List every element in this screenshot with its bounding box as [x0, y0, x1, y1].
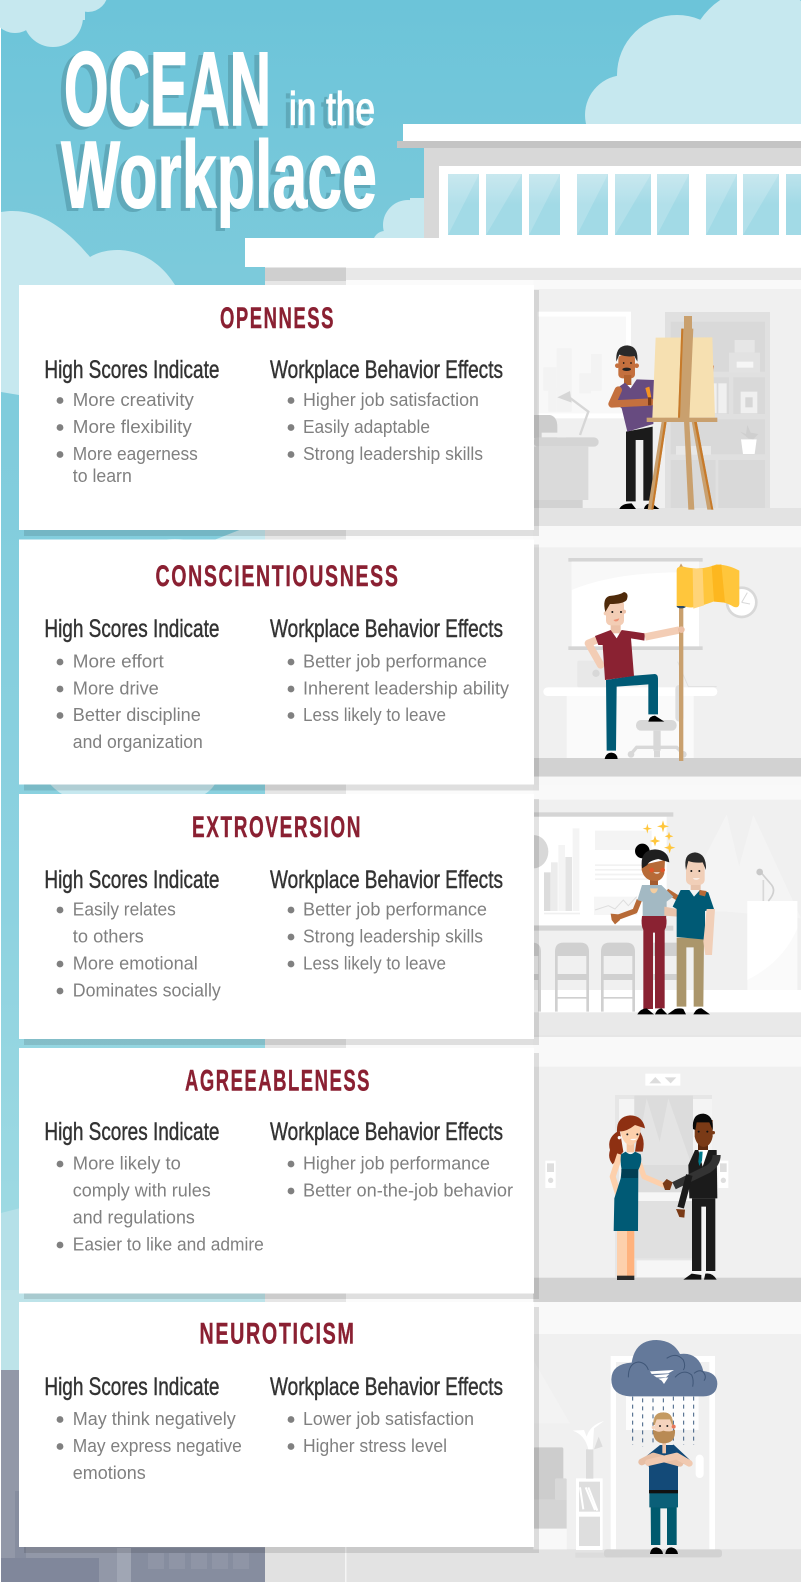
- storm cloud: [611, 1340, 717, 1396]
- scene: handshake at elevator: [533, 1035, 801, 1295]
- heading: openness: OPENNESS: [220, 302, 335, 335]
- column: workplace behavior effects: Better job performance: [303, 898, 487, 920]
- column: high scores indicate: High Scores Indicate: [44, 866, 219, 894]
- column: high scores indicate: More emotional: [73, 952, 198, 974]
- chairs: [533, 943, 677, 1012]
- column: workplace behavior effects: Less likely to leave: [303, 952, 446, 974]
- column: high scores indicate: More creativity: [73, 389, 195, 410]
- column: workplace behavior effects: Higher job satisfaction: [303, 389, 479, 410]
- column: workplace behavior effects: Workplace Behavior Effects: [270, 615, 503, 643]
- heading: conscientiousness: CONSCIENTIOUSNESS: [156, 560, 400, 593]
- column: high scores indicate: to learn: [73, 465, 132, 486]
- column: high scores indicate: May express negative: [73, 1435, 242, 1456]
- flag: [677, 563, 739, 761]
- figure: man with crossed arms: [641, 1412, 690, 1554]
- column: high scores indicate: More flexibility: [73, 416, 193, 437]
- column: high scores indicate: More drive: [73, 678, 159, 698]
- panel: openness: [19, 285, 539, 536]
- column: high scores indicate: and organization: [73, 731, 203, 752]
- column: high scores indicate: May think negatively: [73, 1408, 237, 1429]
- building top floor with windows: [245, 124, 801, 267]
- column: workplace behavior effects: [270, 1118, 513, 1200]
- column: workplace behavior effects: Lower job satisfaction: [303, 1408, 474, 1429]
- panel: extroversion: [19, 794, 539, 1045]
- figure: man in black suit: [663, 1114, 717, 1280]
- column: workplace behavior effects: Workplace Behavior Effects: [270, 356, 503, 384]
- column: high scores indicate: emotions: [73, 1462, 146, 1483]
- column: high scores indicate: comply with rules: [73, 1180, 211, 1200]
- rain: [633, 1397, 694, 1447]
- building base columns: [265, 267, 801, 1582]
- column: high scores indicate: Easier to like and admire: [73, 1234, 264, 1254]
- column: workplace behavior effects: Workplace Behavior Effects: [270, 866, 503, 894]
- column: workplace behavior effects: [270, 615, 510, 725]
- scene: presentation room with two coworkers: [533, 785, 801, 1045]
- column: workplace behavior effects: [270, 1373, 503, 1456]
- column: high scores indicate: High Scores Indicate: [44, 1373, 219, 1401]
- title: OCEAN: [64, 31, 271, 148]
- title: in the: [289, 82, 375, 134]
- heading: agreeableness: AGREEABLENESS: [185, 1064, 371, 1098]
- figure: man: [664, 852, 715, 1014]
- podium and microphone: [747, 869, 797, 990]
- figure: woman in teal dress: [609, 1115, 665, 1280]
- column: high scores indicate: [44, 1118, 264, 1254]
- column: workplace behavior effects: Higher job performance: [303, 1152, 490, 1174]
- heading: neuroticism: NEUROTICISM: [200, 1318, 356, 1350]
- column: high scores indicate: High Scores Indicate: [44, 615, 219, 643]
- column: high scores indicate: to others: [73, 926, 144, 946]
- column: high scores indicate: and regulations: [73, 1206, 195, 1228]
- column: workplace behavior effects: Better job performance: [303, 650, 487, 672]
- column: high scores indicate: [44, 615, 219, 752]
- panel: neuroticism: [19, 1302, 539, 1553]
- column: workplace behavior effects: Strong leadership skills: [303, 926, 483, 946]
- title: Workplace: [61, 122, 377, 228]
- column: high scores indicate: [44, 1373, 242, 1483]
- column: high scores indicate: [44, 356, 219, 486]
- column: workplace behavior effects: [270, 866, 503, 974]
- figure: man with foot on chair: [588, 563, 739, 761]
- panel: conscientiousness: [19, 540, 539, 790]
- column: workplace behavior effects: Easily adaptable: [303, 416, 430, 437]
- heading: extroversion: EXTROVERSION: [192, 811, 362, 844]
- title: [61, 31, 377, 228]
- column: high scores indicate: High Scores Indicate: [44, 1118, 219, 1146]
- figure: painter: [612, 345, 714, 509]
- column: high scores indicate: Easily relates: [73, 898, 176, 920]
- scene: artist at easel in office: [533, 280, 801, 540]
- column: high scores indicate: More eagerness: [73, 443, 198, 464]
- scene: man holding flag: [533, 530, 801, 790]
- column: workplace behavior effects: Less likely to leave: [303, 704, 446, 725]
- city silhouette: [1, 1370, 265, 1582]
- column: workplace behavior effects: Inherent leadership ability: [303, 678, 510, 698]
- figure: woman: [611, 844, 678, 1014]
- easel with canvas: [647, 316, 717, 510]
- column: high scores indicate: Better discipline: [73, 704, 201, 725]
- column: workplace behavior effects: Workplace Behavior Effects: [270, 1118, 503, 1146]
- column: workplace behavior effects: [270, 356, 503, 464]
- scene: stressed man under rain cloud: [533, 1290, 801, 1582]
- column: high scores indicate: More likely to: [73, 1152, 181, 1174]
- column: workplace behavior effects: Better on-the-job behavior: [303, 1180, 513, 1200]
- sparkle stars: [643, 820, 675, 853]
- column: high scores indicate: High Scores Indicate: [44, 356, 219, 384]
- column: high scores indicate: Dominates socially: [73, 980, 222, 1000]
- column: workplace behavior effects: Higher stress level: [303, 1435, 447, 1456]
- column: workplace behavior effects: Strong leadership skills: [303, 443, 483, 464]
- column: high scores indicate: More effort: [73, 650, 164, 672]
- column: high scores indicate: [44, 866, 222, 1000]
- column: workplace behavior effects: Workplace Behavior Effects: [270, 1373, 503, 1401]
- panel: agreeableness: [19, 1048, 539, 1299]
